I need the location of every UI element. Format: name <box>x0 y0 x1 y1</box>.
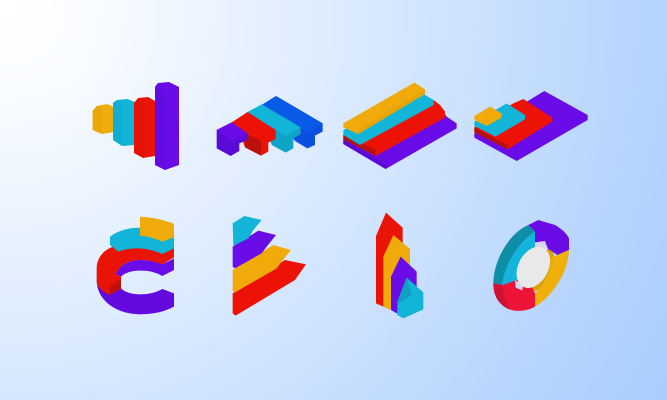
red ring segment <box>97 247 174 295</box>
cyan slab <box>343 90 434 145</box>
icon: stacked long slabs <box>343 83 457 169</box>
icon: stepped ring chart <box>97 217 174 314</box>
yellow ring segment <box>140 217 174 242</box>
purple plate <box>474 91 588 161</box>
icon: stacked nested plates <box>474 91 588 161</box>
icon: tilted donut chart <box>493 220 569 311</box>
cyan ring segment <box>110 228 174 254</box>
yellow arrow <box>383 235 410 310</box>
purple base ring <box>97 280 174 314</box>
cyan bar <box>113 99 135 146</box>
icon: sideways arrow pyramid <box>233 216 306 316</box>
yellow segment <box>535 250 569 307</box>
cyan arrow <box>233 216 262 246</box>
red block <box>232 112 276 156</box>
teal outer segment <box>493 225 535 285</box>
purple bar <box>155 82 179 170</box>
inner lilac wall top <box>535 241 548 250</box>
red arrow <box>233 260 306 316</box>
grey centre disc <box>510 241 557 294</box>
purple upper segment <box>116 258 174 277</box>
purple block <box>217 122 247 156</box>
red arrow <box>376 213 403 307</box>
purple slab <box>343 109 457 169</box>
purple arrow <box>233 231 276 268</box>
blue block <box>262 96 323 148</box>
icon: ascending hexagonal bars <box>93 82 179 170</box>
inner wall <box>504 235 563 300</box>
yellow plate <box>474 107 502 126</box>
purple arrow <box>391 257 417 313</box>
cyan plate <box>474 103 525 137</box>
inner lilac wall bottom <box>515 280 523 290</box>
red slab <box>343 100 445 156</box>
yellow bar <box>93 104 114 134</box>
yellow arrow <box>233 245 291 292</box>
icon: stepped isometric T-blocks <box>217 96 323 156</box>
red plate <box>474 99 552 149</box>
yellow slab <box>343 83 425 134</box>
purple segment <box>528 220 569 255</box>
red bar <box>134 97 155 158</box>
cyan segment <box>502 232 535 287</box>
cyan block <box>247 104 301 153</box>
red segment <box>493 280 535 311</box>
cyan arrow <box>397 278 423 318</box>
icon: nested upward arrows <box>376 213 423 318</box>
